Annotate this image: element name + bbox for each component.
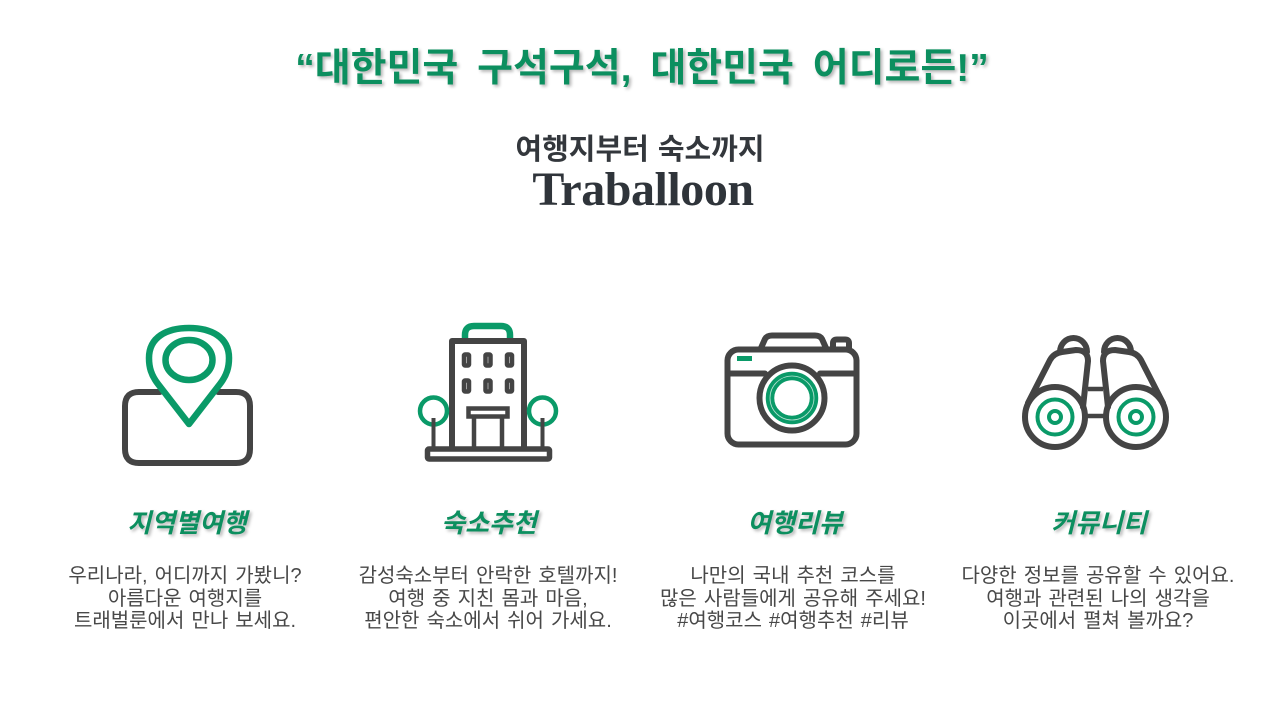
text: travel review: 나만의 국내 추천 코스를 [690, 565, 896, 587]
text: community: 이곳에서 펼쳐 볼까요? [1003, 610, 1193, 632]
text: regional travel: 우리나라, 어디까지 가봤니? [68, 565, 302, 587]
text: regional travel: 아름다운 여행지를 [108, 588, 262, 610]
text: community: 다양한 정보를 공유할 수 있어요. [962, 565, 1234, 587]
text: travel review [660, 565, 926, 632]
heading: community: 커뮤니티 [1051, 508, 1147, 538]
title: “대한민국 구석구석, 대한민국 어디로든!” [295, 47, 989, 90]
subtitle: 여행지부터 숙소까지 [515, 134, 765, 166]
text: lodging: 여행 중 지친 몸과 마음, [388, 588, 588, 610]
text: community [962, 565, 1234, 632]
text: lodging [359, 565, 617, 632]
text: community: 여행과 관련된 나의 생각을 [986, 588, 1210, 610]
text: regional travel [68, 565, 302, 632]
text: travel review: #여행코스 #여행추천 #리뷰 [677, 610, 909, 632]
text: lodging: 편안한 숙소에서 쉬어 가세요. [364, 610, 612, 632]
icon: camera [728, 336, 856, 444]
icon: hotel building [420, 326, 556, 459]
heading: travel review: 여행리뷰 [747, 508, 843, 538]
text: travel review: 많은 사람들에게 공유해 주세요! [660, 588, 926, 610]
heading: lodging: 숙소추천 [441, 508, 537, 538]
icon: binoculars [1025, 338, 1166, 447]
heading: regional travel: 지역별여행 [127, 508, 247, 538]
text: lodging: 감성숙소부터 안락한 호텔까지! [359, 565, 617, 587]
text: regional travel: 트래벌룬에서 만나 보세요. [74, 610, 296, 632]
brand name: Traballoon [532, 163, 754, 216]
icon: map pin [125, 328, 250, 463]
